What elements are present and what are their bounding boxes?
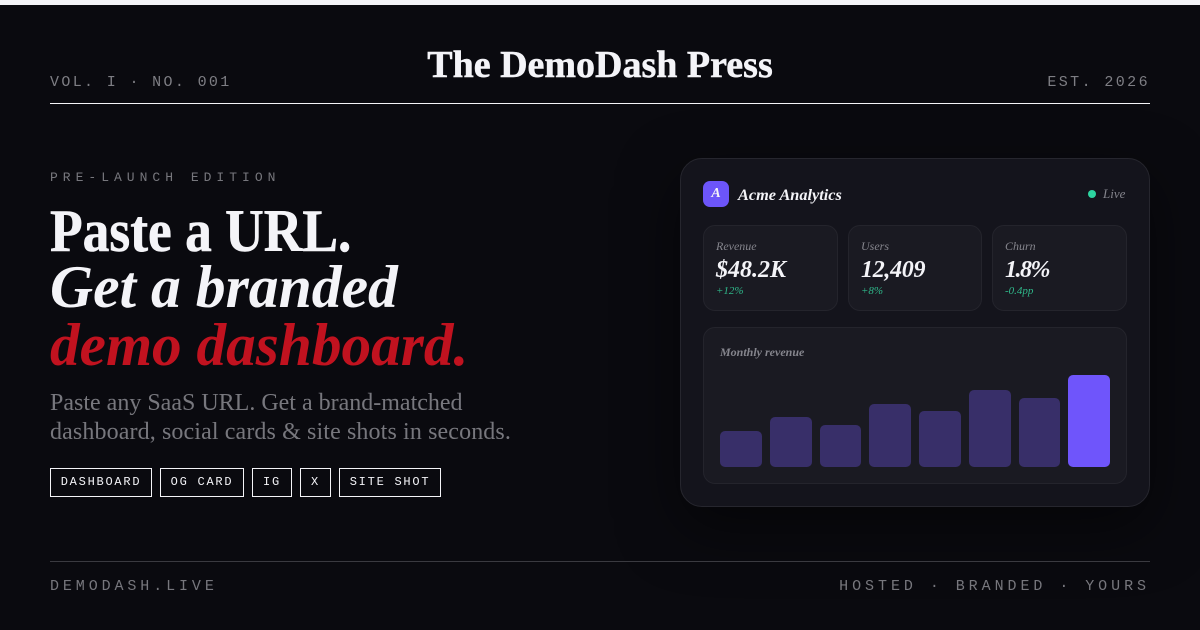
headline line 2: Get a branded [50, 254, 398, 320]
footer tagline: HOSTED · BRANDED · YOURS [839, 578, 1150, 595]
panel: monthly revenue chart [703, 327, 1127, 484]
users label: Users [861, 239, 889, 253]
tag: og card: OG CARD [171, 475, 233, 489]
masthead rule [50, 103, 1150, 104]
masthead established label: EST. 2026 [1047, 74, 1150, 91]
live label: Live [1103, 186, 1125, 201]
churn change: -0.4pp [1005, 285, 1033, 297]
headline line 1: Paste a URL. [50, 198, 351, 264]
subhead [50, 390, 511, 445]
users value: 12,409 [861, 257, 925, 283]
tag: dashboard [50, 468, 152, 497]
footer rule [50, 561, 1150, 562]
headline line 3: demo dashboard. [50, 312, 468, 378]
revenue change: +12% [716, 285, 744, 297]
tag: ig: IG [263, 475, 281, 489]
masthead title: The DemoDash Press [427, 44, 773, 86]
tag: x: X [311, 475, 320, 489]
revenue value: $48.2K [716, 257, 786, 283]
subhead: dashboard, social cards & site shots in seconds. [50, 419, 511, 445]
icon: brand logo [703, 181, 729, 207]
tag: og card [160, 468, 244, 497]
stat: revenue [703, 225, 838, 311]
stat: users [848, 225, 982, 311]
headline [50, 198, 468, 378]
churn label: Churn [1005, 239, 1036, 253]
subhead: Paste any SaaS URL. Get a brand-matched [50, 390, 463, 416]
bar chart [720, 375, 1110, 467]
icon: brand logo: A [711, 186, 721, 201]
panel: dashboard card [680, 158, 1150, 507]
tag: dashboard: DASHBOARD [61, 475, 141, 489]
footer site name: DEMODASH.LIVE [50, 578, 218, 595]
format tags [50, 468, 441, 497]
masthead issue label: VOL. I · NO. 001 [50, 74, 232, 91]
brand name: Acme Analytics [738, 185, 842, 204]
chart title: Monthly revenue [720, 345, 804, 359]
tag: x [300, 468, 331, 497]
tag: ig [252, 468, 292, 497]
icon: live dot [1088, 190, 1096, 198]
users change: +8% [861, 285, 883, 297]
stat: churn [992, 225, 1127, 311]
top strip [0, 0, 1200, 5]
churn value: 1.8% [1005, 257, 1049, 283]
revenue label: Revenue [716, 239, 757, 253]
tag: site shot [339, 468, 441, 497]
tag: site shot: SITE SHOT [350, 475, 430, 489]
eyebrow: PRE-LAUNCH EDITION [50, 170, 280, 185]
live indicator [1088, 186, 1126, 201]
